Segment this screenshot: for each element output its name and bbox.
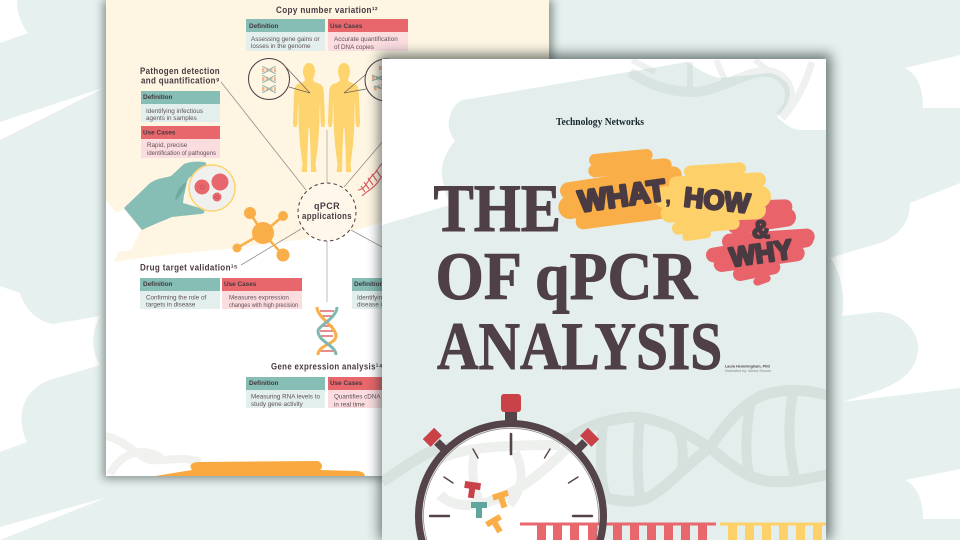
title: OF qPCR: [436, 240, 698, 315]
table: drug target definition: Confirming the role of: [146, 294, 206, 302]
table: drug target definition: Definition: [143, 281, 173, 288]
title: THE: [434, 171, 561, 246]
icon: magnified DNA left: [248, 58, 371, 100]
qPCR applications circle: qPCR: [314, 201, 340, 211]
stopwatch ticks: [430, 434, 592, 516]
stopwatch ring: [415, 420, 607, 540]
orange brush stroke: [149, 461, 365, 477]
splash ampersand: &: [752, 216, 770, 244]
yellow probe comb: [720, 522, 826, 540]
table: disease definition: Identifying markers of: [357, 294, 417, 302]
qPCR applications circle: [298, 183, 356, 241]
byline: Laura Hemmingham, PhD: [725, 364, 770, 368]
table: copy number use cases: of DNA copies: [334, 44, 374, 51]
DNA mesh lower: [382, 390, 830, 501]
table: drug target definition: [140, 278, 220, 309]
table: copy number use cases: [328, 19, 408, 51]
splash: yellow: [665, 168, 760, 237]
icon: red DNA: [358, 163, 382, 196]
table: pathogen use cases: [141, 126, 220, 158]
icon: human figures: [293, 63, 360, 172]
table: pathogen definition: [141, 91, 220, 122]
icon: DNA helix: [317, 307, 337, 355]
splash: red: [713, 207, 807, 282]
table: disease definition: Definition: [354, 281, 384, 288]
splash word: HOW: HOW: [683, 182, 752, 219]
title: ANALYSIS: [437, 308, 722, 384]
byline: Illustrated by: Alisha Shoom: [725, 368, 772, 373]
DNA mesh top right: [630, 60, 812, 118]
stopwatch: [415, 394, 826, 540]
table: drug target use cases: Use Cases: [224, 281, 257, 288]
byline: [725, 364, 772, 373]
table: copy number definition: Assessing gene gains or: [251, 36, 320, 43]
splash word: WHAT: WHAT: [576, 174, 668, 219]
table: copy number use cases: Use Cases: [330, 23, 363, 30]
table: drug target use cases: changes with high precision: [229, 302, 298, 309]
heading: pathogen detection: Pathogen detection: [140, 66, 220, 76]
splash comma: ,: [665, 186, 671, 208]
shadow of cover page: [379, 54, 831, 540]
table: copy number use cases: Accurate quantification: [334, 36, 398, 43]
table: drug target definition: targets in disease: [146, 302, 196, 308]
table: disease definition: disease in patients: [357, 302, 409, 308]
table: gene expression definition: [246, 377, 325, 408]
icon: magnified DNA right: [364, 58, 390, 102]
table: drug target use cases: Measures expression: [229, 294, 289, 302]
red probe comb: [520, 522, 716, 540]
splash word: WHY: WHY: [728, 234, 794, 273]
stopwatch buttons: [423, 394, 599, 458]
faint DNA in face: [425, 440, 575, 508]
shadow of back page: [103, 0, 553, 479]
table: gene expression use cases: Use Cases: [330, 380, 363, 387]
table: copy number definition: losses in the genome: [251, 43, 311, 50]
logo: Technology Networks: [556, 117, 644, 128]
table: gene expression use cases: Quantifies cDNA production: [334, 394, 412, 400]
table: pathogen definition: agents in samples: [146, 115, 197, 122]
heading: pathogen detection: and quantification⁹: [141, 76, 220, 86]
heading: pathogen detection: [140, 66, 220, 86]
heading: copy number variation: Copy number variation¹²: [276, 5, 378, 15]
table: pathogen use cases: identification of pathogens: [147, 150, 216, 157]
icon: gloved hand with petri dish: [106, 162, 235, 254]
T-shaped nucleotides: [463, 481, 512, 536]
table: copy number definition: [246, 19, 325, 51]
cream background shape: [106, 0, 549, 262]
table: pathogen definition: Identifying infectious: [146, 108, 203, 115]
back page: qPCR applications: [106, 0, 549, 477]
table: gene expression definition: Measuring RNA levels to: [251, 394, 320, 400]
cover page: [382, 59, 830, 540]
heading: gene expression analysis: Gene expression analysis¹⁴: [271, 362, 383, 372]
qPCR applications circle: applications: [302, 211, 352, 221]
stopwatch face: [423, 428, 599, 540]
table: pathogen use cases: Use Cases: [143, 130, 176, 136]
table: copy number definition: Definition: [249, 23, 279, 30]
icon: orange molecule: [232, 207, 290, 262]
paint splashes: [568, 155, 807, 282]
cover brush background: [382, 62, 826, 540]
heading: drug target validation: Drug target validation¹⁵: [140, 262, 238, 272]
table: gene expression use cases: [328, 377, 382, 408]
title: [434, 186, 720, 370]
splash: orange: [568, 155, 673, 222]
table: pathogen definition: Definition: [143, 94, 173, 101]
table: gene expression use cases: in real time: [334, 402, 365, 408]
table: gene expression definition: Definition: [249, 380, 279, 387]
bottom mesh decoration: [106, 436, 200, 474]
table: pathogen use cases: Rapid, precise: [147, 142, 188, 149]
table: disease definition: [352, 278, 382, 309]
connector lines: [221, 82, 384, 302]
table: gene expression definition: study gene activity: [251, 401, 304, 408]
table: drug target use cases: [222, 278, 302, 309]
